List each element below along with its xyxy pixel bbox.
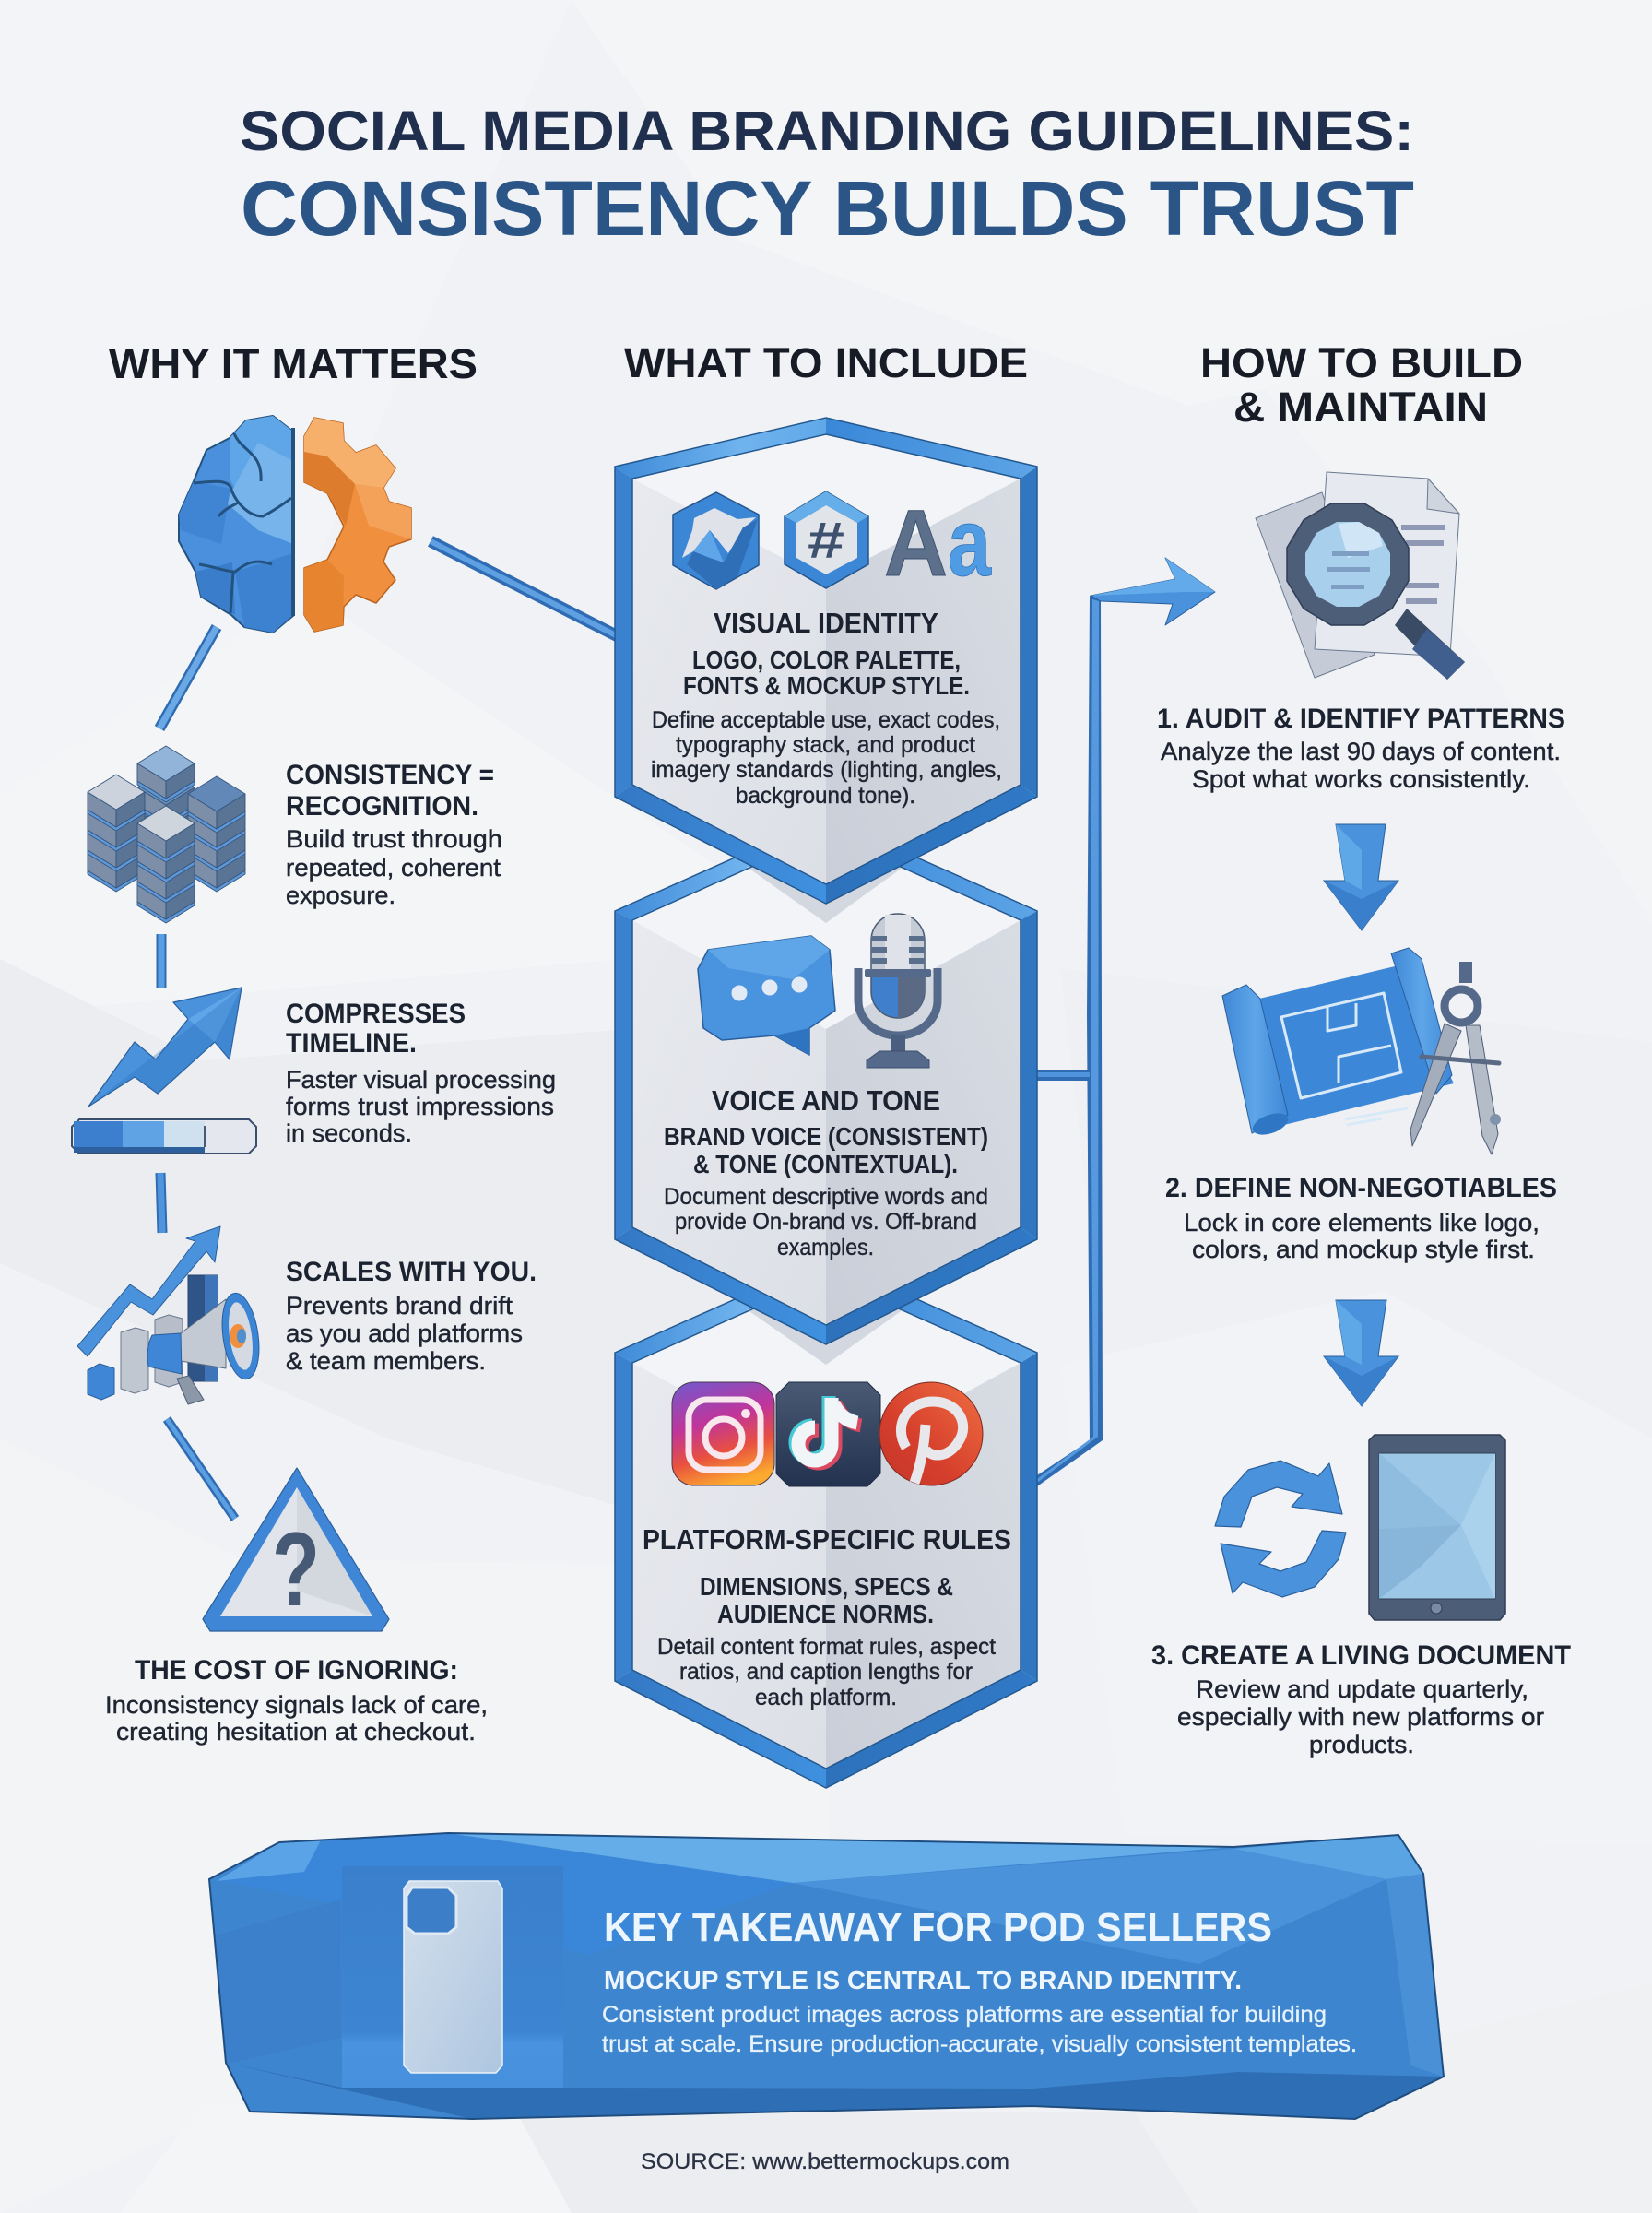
text: visual identity: VISUAL IDENTITY [714, 607, 938, 639]
text: step 3 living document [1151, 1640, 1571, 1758]
text: consistency equals recognition: exposure. [286, 882, 395, 909]
icon: chat bubble [698, 936, 835, 1055]
icon: logo hexagon [673, 492, 759, 589]
text: voice and tone [664, 1084, 988, 1260]
text: scales with you: as you add platforms [286, 1320, 523, 1347]
text: voice and tone: Document descriptive words and [664, 1184, 988, 1210]
text: the cost of ignoring: THE COST OF IGNORING: [135, 1655, 458, 1686]
text: visual identity: imagery standards (lighting, angles, [651, 757, 1002, 783]
text: scales with you: & team members. [286, 1347, 486, 1375]
text: consistency equals recognition: RECOGNITION. [286, 791, 478, 822]
text: platform-specific rules: PLATFORM-SPECIFIC RULES [643, 1523, 1011, 1556]
text: step 3 living document: especially with new platforms or [1177, 1703, 1544, 1731]
text: step 3 living document: 3. CREATE A LIVING DOCUMENT [1151, 1640, 1571, 1671]
icon: instagram [672, 1382, 774, 1485]
text: scales with you: SCALES WITH YOU. [286, 1257, 537, 1287]
text: visual identity: Define acceptable use, exact codes, [652, 707, 1000, 733]
text: voice and tone: BRAND VOICE (CONSISTENT) [664, 1122, 988, 1151]
icon: growth chart and megaphone [77, 1226, 264, 1404]
connector arrow: what-to-include to how-to-build [1037, 558, 1215, 1486]
panel: platform-specific rules hexagon [615, 1259, 1037, 1788]
heading: how to build and maintain [1200, 339, 1523, 431]
icon: typography Aa [884, 490, 992, 597]
text: step 3 living document: Review and update quarterly, [1196, 1675, 1528, 1703]
text: the cost of ignoring [105, 1655, 488, 1746]
text: step 1 audit: Analyze the last 90 days of content. [1161, 738, 1561, 765]
text: visual identity: typography stack, and product [676, 732, 975, 758]
text: visual identity [651, 607, 1002, 809]
icon: pinterest [879, 1382, 983, 1485]
arrow: down to step 2 [1324, 824, 1398, 930]
text: visual identity: FONTS & MOCKUP STYLE. [683, 671, 970, 700]
text: consistency equals recognition [286, 760, 502, 909]
text: step 3 living document: products. [1309, 1731, 1414, 1758]
source line: SOURCE: www.bettermockups.com [641, 2149, 1009, 2174]
text: consistency equals recognition: repeated, coherent [286, 854, 502, 882]
text: step 2 define: Lock in core elements like logo, [1184, 1209, 1540, 1237]
text: platform-specific rules [643, 1523, 1011, 1710]
title [240, 100, 1414, 252]
text: step 2 define: colors, and mockup style first. [1192, 1236, 1535, 1263]
phone mockup image [342, 1866, 563, 2088]
text: step 1 audit [1157, 704, 1565, 793]
icon: warning triangle with question mark [203, 1468, 389, 1631]
icon: blueprint and compass [1222, 948, 1501, 1154]
text: compresses timeline: TIMELINE. [286, 1028, 417, 1059]
icon: hashtag hexagon [785, 491, 868, 588]
icon: typography Aa: A [884, 491, 948, 596]
text: the cost of ignoring: Inconsistency signals lack of care, [105, 1691, 488, 1719]
text: compresses timeline: Faster visual processing [286, 1066, 556, 1094]
text: voice and tone: provide On-brand vs. Off-brand [675, 1209, 977, 1235]
text: compresses timeline: forms trust impressions [286, 1093, 554, 1120]
text: takeaway: MOCKUP STYLE IS CENTRAL TO BRAND IDENTITY. [604, 1966, 1242, 1994]
title: SOCIAL MEDIA BRANDING GUIDELINES: [240, 100, 1414, 162]
text: takeaway: Consistent product images across platforms are essential for building [602, 2002, 1327, 2028]
text: scales with you: Prevents brand drift [286, 1292, 513, 1320]
text: takeaway: KEY TAKEAWAY FOR POD SELLERS [604, 1905, 1272, 1950]
text: platform-specific rules: AUDIENCE NORMS. [717, 1600, 934, 1628]
panel: voice and tone hexagon [615, 817, 1037, 1344]
icon: typography Aa: a [948, 490, 992, 597]
text: compresses timeline: COMPRESSES [286, 999, 466, 1029]
icon: rising arrow and progress bar [72, 988, 256, 1154]
text: voice and tone: VOICE AND TONE [712, 1084, 940, 1117]
icon: documents and magnifying glass [1256, 472, 1465, 680]
text: step 2 define [1165, 1173, 1557, 1263]
icon: microphone [858, 914, 938, 1068]
icon: brain and gear [179, 416, 411, 633]
text: platform-specific rules: ratios, and caption lengths for [679, 1659, 973, 1685]
text: step 1 audit: Spot what works consistently. [1192, 765, 1530, 793]
arrow: down to step 3 [1324, 1300, 1398, 1406]
text: step 2 define: 2. DEFINE NON-NEGOTIABLES [1165, 1173, 1557, 1203]
text: takeaway: trust at scale. Ensure production-accurate, visually consistent templates. [602, 2031, 1357, 2057]
panel: visual identity hexagon [615, 418, 1037, 904]
heading: how to build and maintain: HOW TO BUILD [1200, 339, 1523, 386]
text: the cost of ignoring: creating hesitation at checkout. [116, 1718, 476, 1746]
heading: why it matters: WHY IT MATTERS [109, 340, 478, 387]
text: scales with you [286, 1257, 537, 1375]
text: step 1 audit: 1. AUDIT & IDENTIFY PATTERNS [1157, 704, 1565, 734]
icon: hashtag hexagon: # [808, 511, 844, 569]
icon: tiktok [776, 1382, 880, 1486]
text: platform-specific rules: DIMENSIONS, SPECS & [700, 1572, 953, 1601]
text: visual identity: background tone). [736, 783, 915, 809]
icon: refresh arrows and tablet [1215, 1435, 1505, 1620]
text: voice and tone: examples. [777, 1235, 874, 1260]
text: platform-specific rules: each platform. [755, 1685, 897, 1710]
text: platform-specific rules: Detail content format rules, aspect [657, 1634, 996, 1660]
connector lines: why-it-matters column [159, 541, 618, 1519]
icon: warning triangle with question mark: ? [272, 1511, 320, 1628]
text: consistency equals recognition: Build trust through [286, 825, 502, 853]
text: compresses timeline: in seconds. [286, 1119, 412, 1147]
text: takeaway [602, 1905, 1357, 2057]
text: compresses timeline [286, 999, 556, 1147]
text: voice and tone: & TONE (CONTEXTUAL). [693, 1150, 958, 1178]
panel: key takeaway banner [203, 1826, 1457, 2130]
heading: how to build and maintain: & MAINTAIN [1233, 384, 1488, 431]
title: CONSISTENCY BUILDS TRUST [241, 165, 1414, 252]
icon: stacked cubes [88, 746, 245, 923]
text: visual identity: LOGO, COLOR PALETTE, [692, 645, 961, 674]
heading: what to include: WHAT TO INCLUDE [624, 339, 1028, 386]
text: consistency equals recognition: CONSISTENCY = [286, 760, 494, 790]
